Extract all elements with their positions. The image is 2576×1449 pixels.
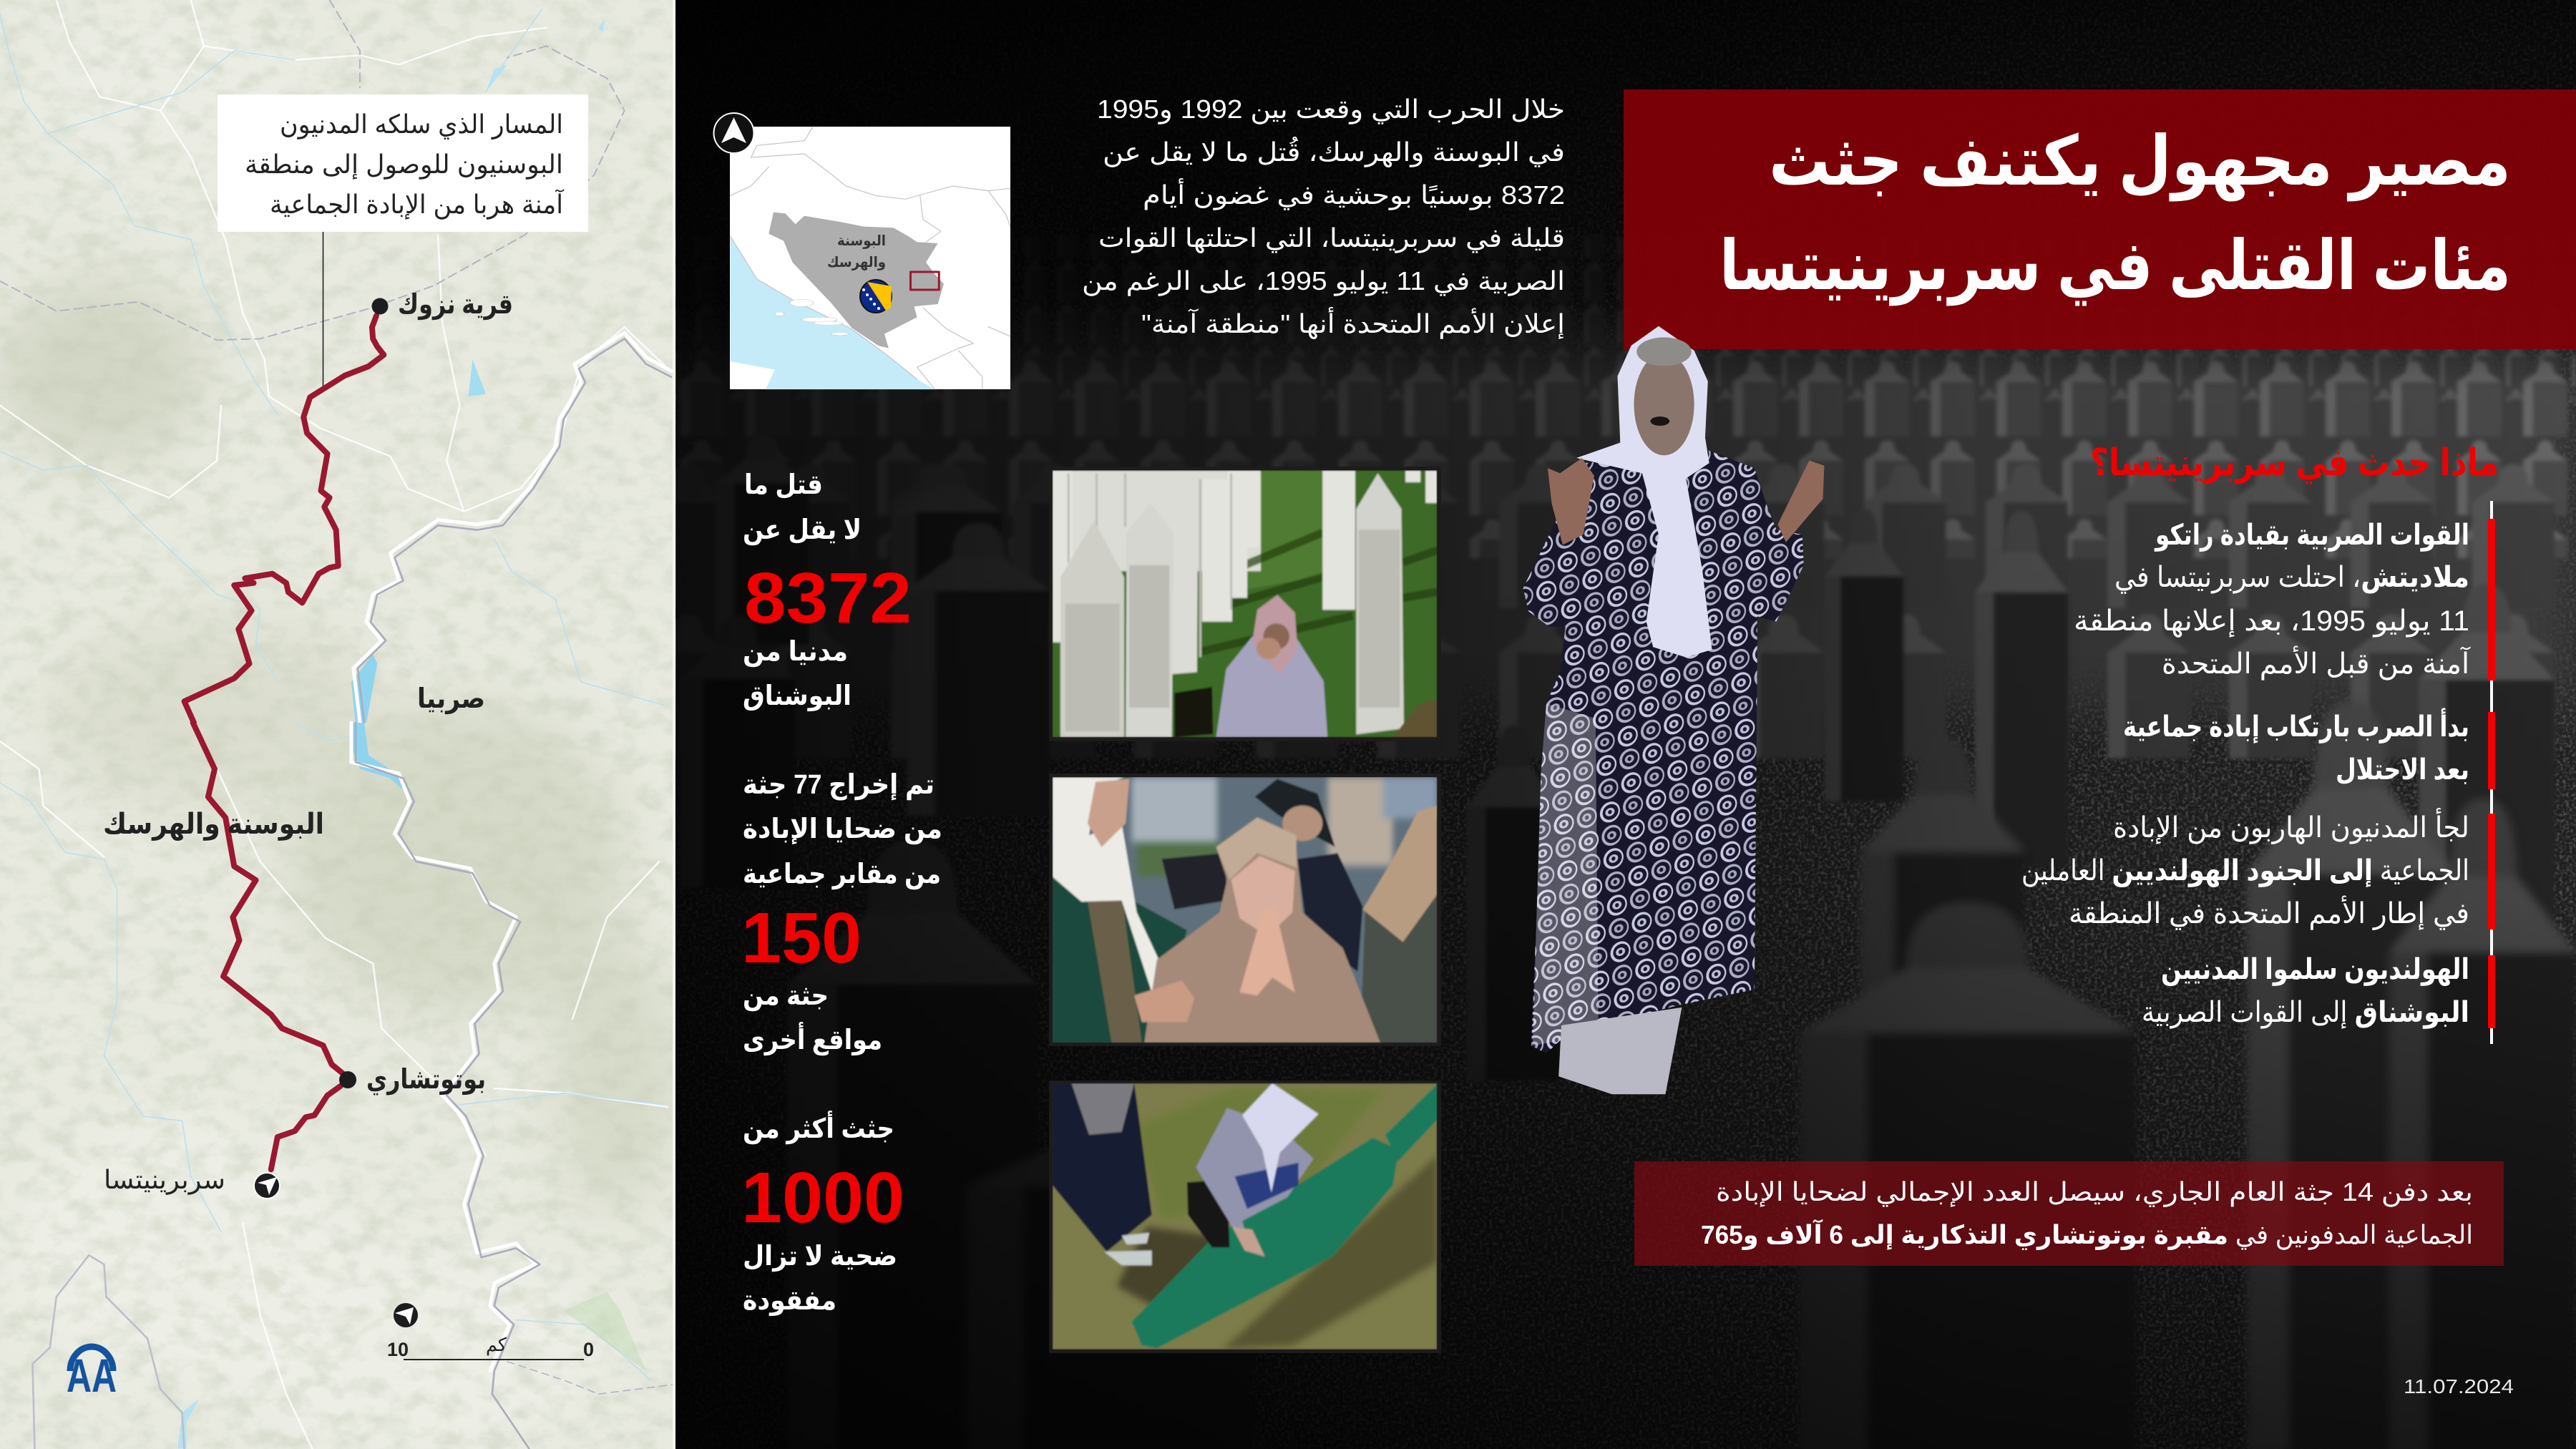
date: 11.07.2024: [2404, 1375, 2514, 1397]
woman: dress: [1523, 450, 1804, 1053]
timeline item 1: 11 يوليو 1995، بعد إعلانها منطقة: [2074, 605, 2469, 638]
woman: left hand: [1548, 458, 1594, 545]
timeline bar: [2488, 501, 2495, 1044]
locator label: [827, 233, 886, 270]
stat: 1000 missing: 1000: [741, 1158, 904, 1238]
icon: map compass: [394, 1303, 418, 1327]
scale bar: [387, 1334, 594, 1360]
timeline item 2: بعد الاحتلال: [2336, 754, 2469, 786]
callout: total burials: بعد دفن 14 جثة العام الجاري، سيصل العدد الإجمالي لضحايا الإبادة: [1716, 1177, 2473, 1207]
callout: total burials: [1634, 1161, 2504, 1266]
callout: route description: المسار الذي سلكه المدنيون: [280, 109, 563, 140]
timeline item 1: آمنة من قبل الأمم المتحدة: [2162, 645, 2471, 680]
timeline item 3: الجماعية إلى الجنود الهولنديين العاملين: [2021, 855, 2469, 887]
timeline item 4: [2142, 954, 2469, 1029]
woman: sunlit skirt side: [1533, 703, 1599, 1045]
marker: Potocari: بوتوتشاري: [366, 1065, 486, 1095]
panel: route map: [0, 0, 680, 1449]
intro paragraph: إعلان الأمم المتحدة أنها "منطقة آمنة": [1141, 307, 1565, 339]
icon: Bosnia flag: [860, 280, 892, 313]
map: white edge strip: [673, 0, 675, 1449]
icon: north arrow: [714, 113, 754, 153]
photo: crying girl: [1049, 774, 1441, 1046]
woman: right hand: [1777, 461, 1824, 542]
stat: 150 bodies: مواقع أخرى: [743, 1022, 882, 1055]
route line: [185, 316, 384, 1169]
label: Serbia: صربيا: [417, 684, 485, 714]
stat: 150 bodies: [741, 770, 942, 1055]
marker: Nezuk village: قرية نزوك: [398, 290, 513, 321]
map: roads, rivers, borders (lower): [0, 723, 672, 1448]
woman figure: [1523, 326, 1824, 1094]
timeline item 3: [2021, 808, 2469, 930]
stat: 150 bodies: من مقابر جماعية: [743, 859, 941, 889]
timeline item 4: الهولنديون سلموا المدنيين: [2161, 954, 2469, 986]
map: roads, rivers, borders (upper): [0, 0, 671, 723]
woman: mouth: [1650, 416, 1669, 426]
stat: 150 bodies: جثة من: [743, 981, 829, 1011]
stat: 8372 killed: 8372: [744, 558, 912, 638]
stat: 1000 missing: [741, 1111, 904, 1316]
photo: mourner among gravestones: [1049, 467, 1441, 741]
intro paragraph: 8372 بوسنيًا بوحشية في غضون أيام: [1143, 178, 1565, 210]
stat: 8372 killed: لا يقل عن: [743, 515, 862, 545]
intro paragraph: في البوسنة والهرسك، قُتل ما لا يقل عن: [1103, 137, 1565, 167]
stat: 8372 killed: البوشناق: [743, 681, 852, 711]
locator label: البوسنة: [837, 233, 886, 249]
intro paragraph: الصربية في 11 يوليو 1995، على الرغم من: [1082, 266, 1565, 296]
woman: headscarf: [1576, 326, 1712, 658]
woman: face: [1634, 353, 1694, 455]
timeline item 4: البوشناق إلى القوات الصربية: [2142, 997, 2469, 1029]
title banner: [1624, 89, 2576, 349]
locator label: والهرسك: [827, 255, 886, 270]
timeline item 3: لجأ المدنيون الهاربون من الإبادة: [2113, 808, 2469, 844]
intro paragraph: قليلة في سربرينيتسا، التي احتلتها القوات: [1098, 223, 1565, 253]
marker: Nezuk village: [372, 290, 513, 321]
stat: 1000 missing: جثث أكثر من: [743, 1111, 894, 1144]
timeline item 1: [2074, 519, 2471, 680]
stat: 8372 killed: قتل ما: [744, 470, 823, 500]
scale bar: كم: [486, 1334, 507, 1356]
stat: 8372 killed: مدنيا من: [743, 637, 848, 667]
stat: 1000 missing: ضحية لا تزال: [743, 1241, 897, 1272]
woman: trousers: [1558, 1008, 1682, 1094]
callout: route description: آمنة هربا من الإبادة الجماعية: [270, 188, 565, 220]
leader line: [322, 232, 323, 386]
scale bar: 10: [387, 1339, 409, 1360]
heading: what happened: ماذا حدث في سربرينيتسا؟: [2090, 442, 2499, 484]
label: Bosnia and Herzegovina: البوسنة والهرسك: [103, 809, 324, 841]
scale bar: 0: [583, 1339, 594, 1360]
timeline item 3: في إطار الأمم المتحدة في المنطقة: [2069, 895, 2469, 930]
stat: 150 bodies: من ضحايا الإبادة: [743, 814, 942, 844]
stat: 1000 missing: مفقودة: [743, 1286, 836, 1316]
callout: total burials: الجماعية المدفونين في مقبرة بوتوتشاري التذكارية إلى 6 آلاف و765: [1701, 1219, 2473, 1250]
stat: 150 bodies: تم إخراج 77 جثة: [743, 770, 935, 801]
timeline item 1: القوات الصربية بقيادة راتكو: [2154, 519, 2469, 552]
marker: Srebrenica: سربرينيتسا: [104, 1165, 225, 1195]
callout: route description: [218, 94, 588, 232]
woman: hair: [1636, 337, 1692, 366]
stat: 150 bodies: 150: [741, 898, 862, 978]
callout: route description: البوسنيون للوصول إلى منطقة: [245, 150, 563, 180]
intro paragraph: خلال الحرب التي وقعت بين 1992 و1995: [1097, 94, 1565, 125]
timeline item 2: بدأ الصرب بارتكاب إبادة جماعية: [2123, 708, 2469, 743]
timeline item 1: ملاديتش، احتلت سربرنيتسا في: [2114, 562, 2469, 594]
intro paragraph: [1082, 94, 1565, 339]
locator map: [714, 113, 1010, 389]
logo: Anadolu Agency: AA: [67, 1349, 117, 1402]
marker: Srebrenica: [104, 1165, 280, 1199]
background: cemetery photo: [676, 0, 2576, 1449]
photo: woman at green coffin: [1049, 1080, 1441, 1353]
stat: 8372 killed: [743, 470, 912, 711]
timeline item 2: [2123, 708, 2469, 786]
